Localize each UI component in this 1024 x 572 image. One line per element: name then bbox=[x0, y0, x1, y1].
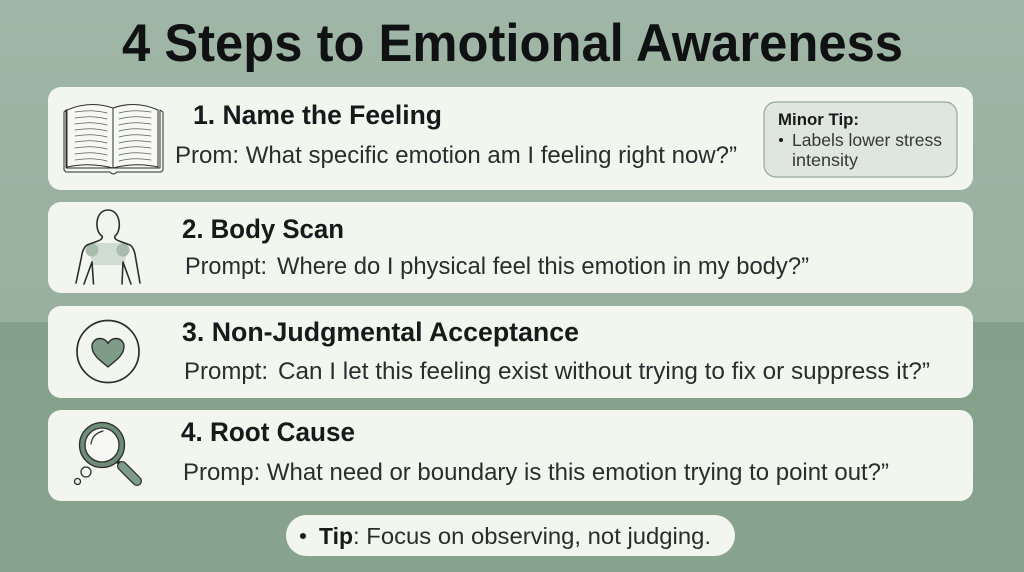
step 3 prompt: Can I let this feeling exist without trying to fix or suppress it?” bbox=[278, 358, 930, 385]
footer tip pill: : Focus on observing, not judging. bbox=[353, 523, 711, 549]
icon: body outline bbox=[76, 210, 140, 284]
step 1 heading: 1. Name the Feeling bbox=[193, 100, 442, 130]
step 4 heading: 4. Root Cause bbox=[181, 417, 355, 447]
icon: open book bbox=[64, 104, 163, 174]
panel: step 3 non-judgmental acceptance bbox=[48, 306, 973, 398]
panel: step 4 root cause bbox=[48, 410, 973, 501]
step 3 prompt: Prompt: bbox=[184, 358, 268, 385]
footer tip pill: Tip bbox=[319, 523, 353, 549]
callout: minor tip bbox=[764, 102, 957, 177]
step 1 prompt: Prom: What specific emotion am I feeling right now?” bbox=[175, 142, 737, 169]
title: 4 Steps to Emotional Awareness bbox=[122, 14, 903, 73]
step 3 heading: 3. Non-Judgmental Acceptance bbox=[182, 317, 579, 347]
step 2 prompt: Prompt: bbox=[185, 253, 267, 280]
step 2 heading: 2. Body Scan bbox=[182, 214, 344, 244]
panel: step 1 name the feeling bbox=[48, 87, 973, 190]
panel: step 2 body scan bbox=[48, 202, 973, 293]
callout: minor tip: Labels lower stress bbox=[792, 130, 942, 150]
callout: minor tip: intensity bbox=[792, 150, 858, 170]
icon: heart in circle bbox=[77, 320, 139, 382]
step 4 prompt: Promp: What need or boundary is this emotion trying to point out?” bbox=[183, 459, 889, 486]
icon: magnifying glass with thought bubbles bbox=[74, 422, 137, 484]
callout: minor tip: Minor Tip: bbox=[778, 111, 859, 129]
step 2 prompt: Where do I physical feel this emotion in my body?” bbox=[277, 253, 809, 280]
footer tip pill bbox=[286, 515, 735, 556]
